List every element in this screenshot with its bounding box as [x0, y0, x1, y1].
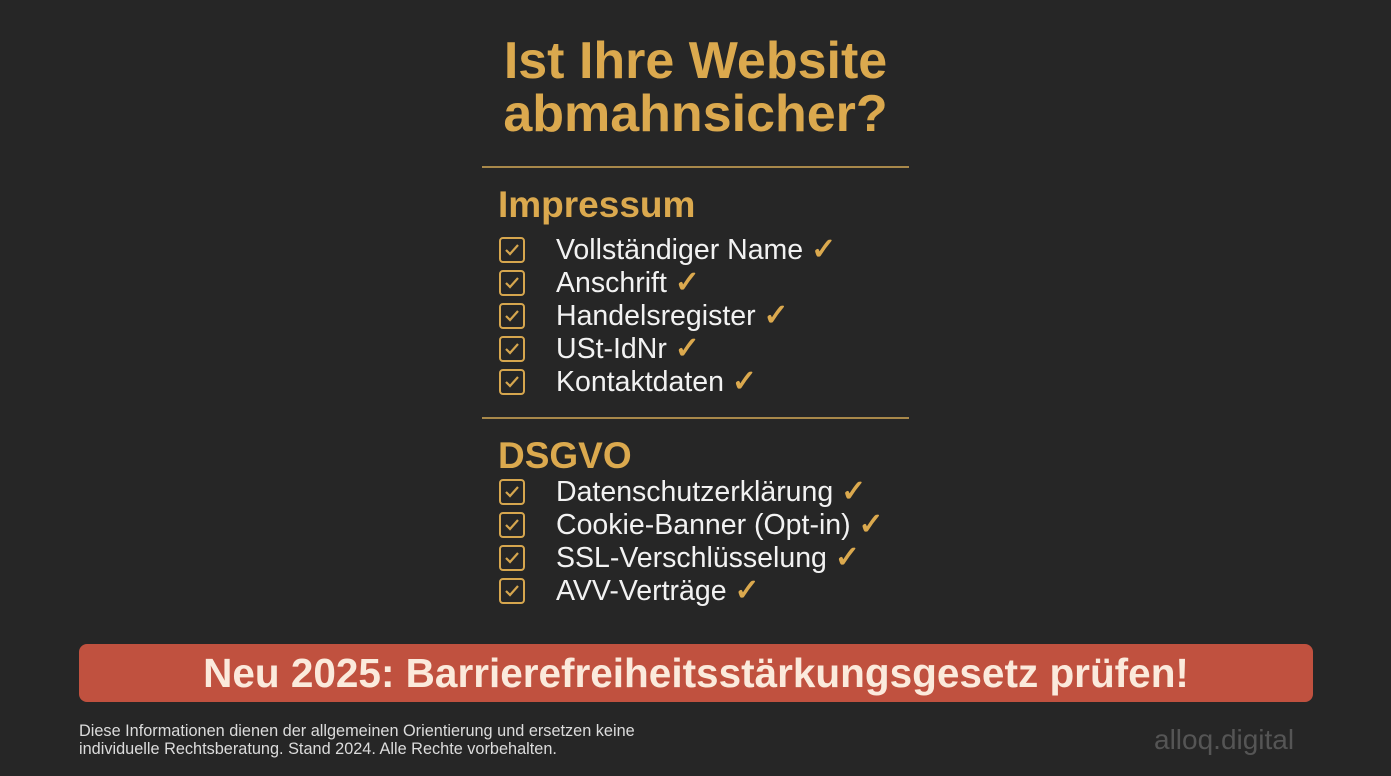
callout bar: Neu 2025: Barrierefreiheitsstärkungsgesetz prüfen! — [203, 650, 1189, 696]
item: Handelsregister — [499, 299, 789, 332]
item: SSL-Verschlüsselung — [499, 541, 860, 574]
footer disclaimer: Diese Informationen dienen der allgemeinen Orientierung und ersetzen keine — [79, 722, 635, 740]
item: Vollständiger Name — [499, 233, 836, 266]
text: Vollständiger Name ✓ — [556, 233, 836, 266]
text: USt-IdNr ✓ — [556, 332, 700, 365]
text: Anschrift ✓ — [556, 266, 700, 299]
title — [503, 32, 888, 143]
footer disclaimer: individuelle Rechtsberatung. Stand 2024. Alle Rechte vorbehalten. — [79, 740, 557, 758]
callout bar — [79, 644, 1313, 702]
text: Cookie-Banner (Opt-in) ✓ — [556, 508, 884, 541]
text: SSL-Verschlüsselung ✓ — [556, 541, 860, 574]
footer disclaimer — [79, 722, 635, 758]
item: Anschrift — [499, 266, 700, 299]
title: abmahnsicher? — [503, 85, 888, 143]
text: Handelsregister ✓ — [556, 299, 789, 332]
text: Kontaktdaten ✓ — [556, 365, 757, 398]
brand: alloq.digital — [1154, 724, 1294, 755]
item: AVV-Verträge — [499, 574, 760, 607]
heading: Impressum: Impressum — [498, 184, 695, 225]
text: Datenschutzerklärung ✓ — [556, 475, 866, 508]
title: Ist Ihre Website — [504, 32, 887, 90]
text: AVV-Verträge ✓ — [556, 574, 760, 607]
item: Datenschutzerklärung — [499, 475, 866, 508]
item: Cookie-Banner — [499, 508, 884, 541]
item: USt-IdNr — [499, 332, 700, 365]
heading: DSGVO: DSGVO — [498, 435, 632, 476]
item: Kontaktdaten — [499, 365, 757, 398]
